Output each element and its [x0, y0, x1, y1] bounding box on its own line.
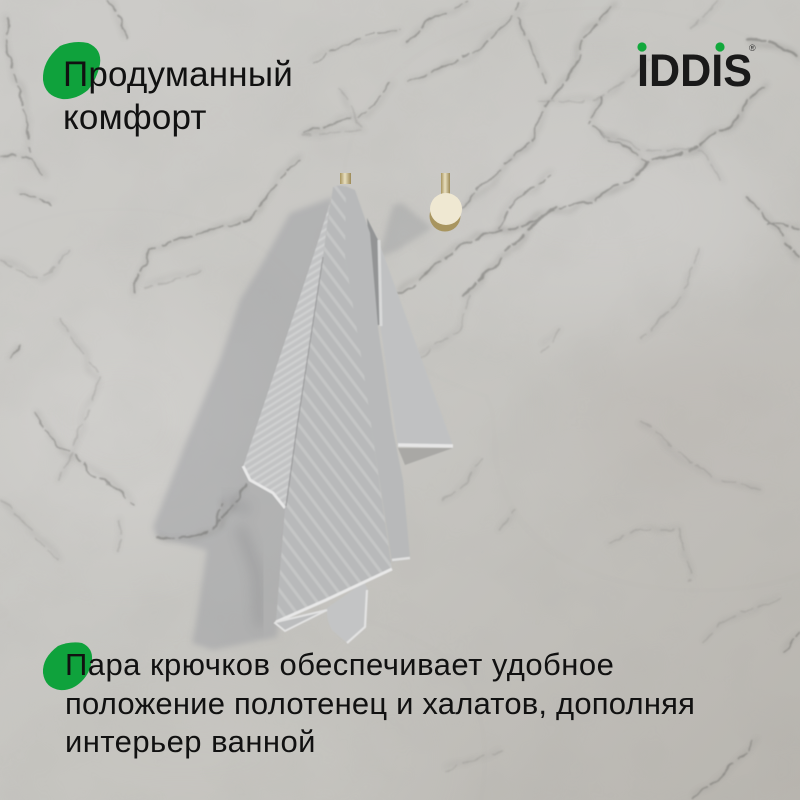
description text: положение полотенец и халатов, дополняя — [65, 686, 695, 720]
towel: ribbed left panel — [243, 203, 330, 508]
title: Продуманный — [63, 55, 293, 94]
towel shadow on wall — [153, 197, 432, 650]
towel: lower flap — [327, 582, 368, 643]
description text — [65, 647, 695, 759]
towel: middle band — [345, 186, 410, 562]
towel: right back panel — [377, 237, 453, 446]
towel: dark inner fold — [367, 218, 381, 325]
title — [63, 55, 293, 137]
towel: striped front panel — [276, 186, 392, 622]
icon: right brass hook — [430, 173, 462, 232]
description text: Пара крючков обеспечивает удобное — [65, 647, 614, 682]
description text: интерьер ванной — [65, 724, 316, 759]
towel — [243, 186, 453, 643]
towel: shadow under right panel — [398, 448, 453, 465]
title: комфорт — [63, 98, 207, 137]
icon: left brass hook pin — [340, 173, 351, 184]
logo: IDDIS: ® — [749, 43, 756, 53]
logo: IDDIS: IDDIS — [637, 45, 752, 96]
